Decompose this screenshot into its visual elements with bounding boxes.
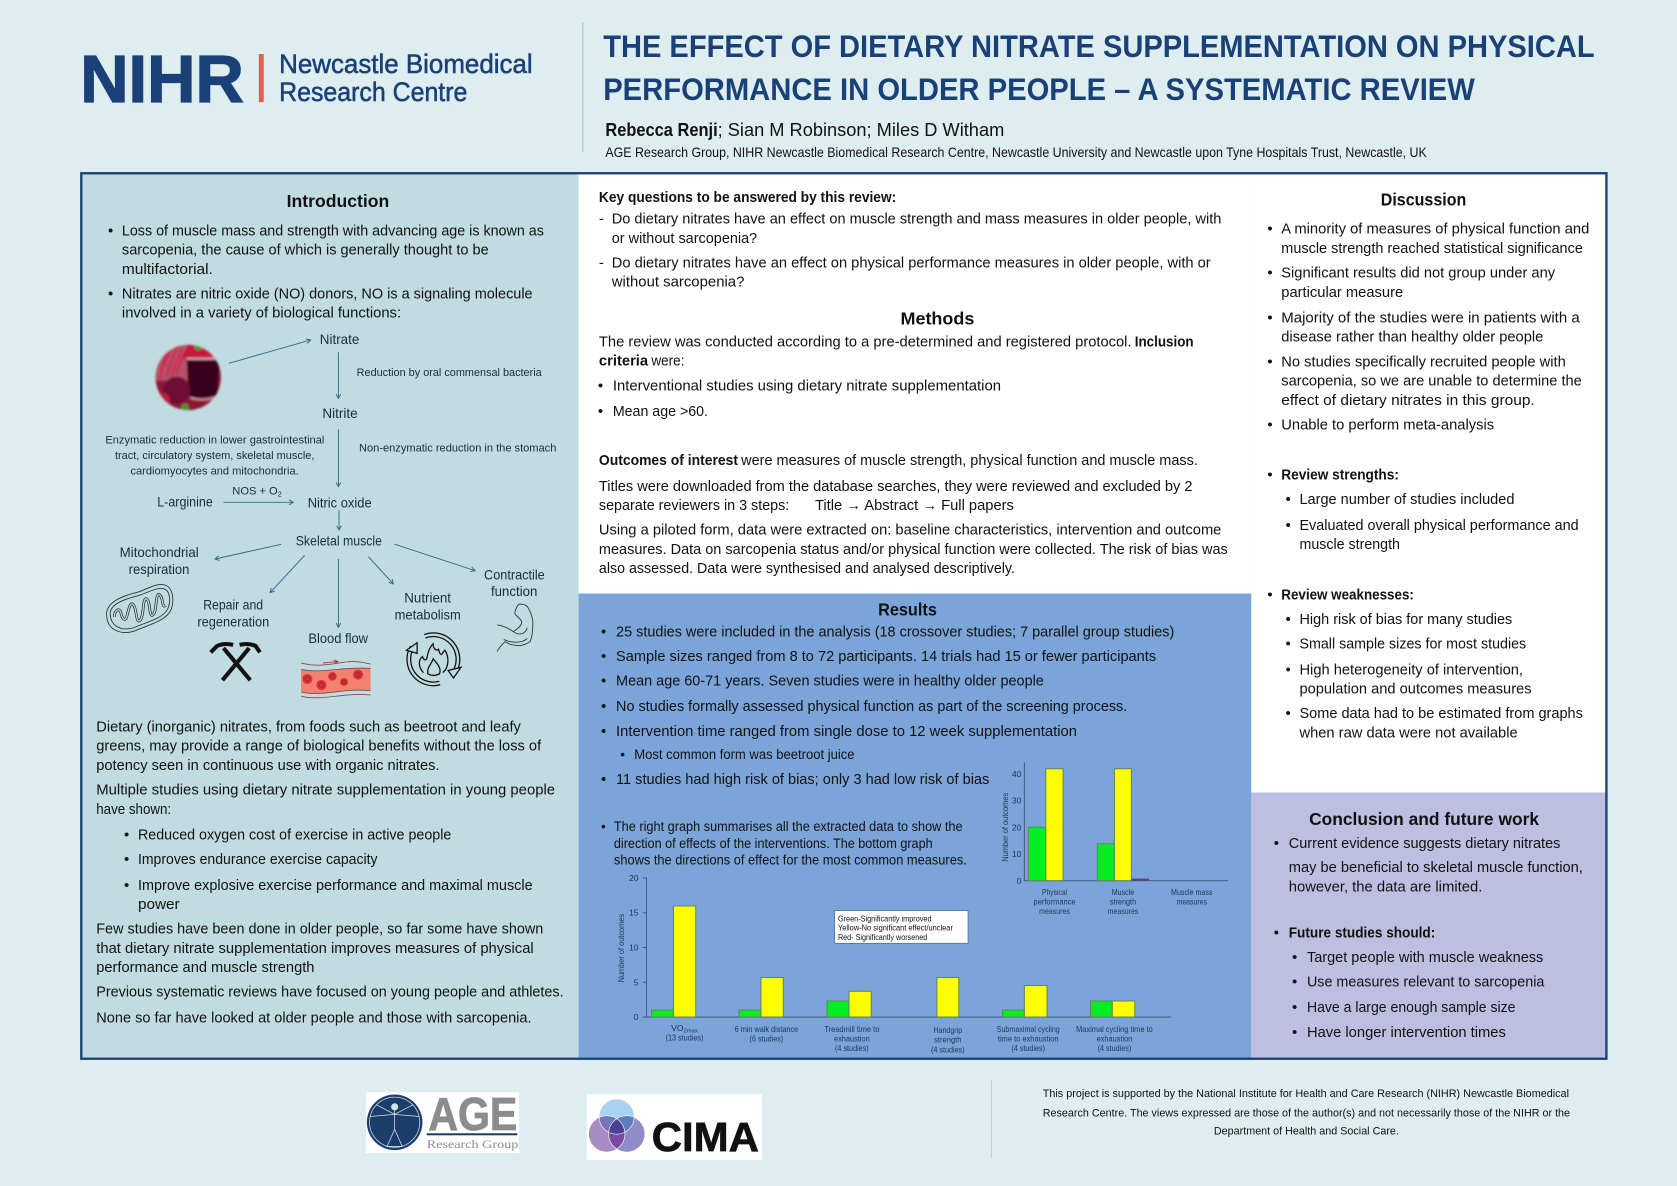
list: future studies: • (1292, 1024, 1297, 1041)
bars: muscle strength (1097, 769, 1149, 881)
panel: conclusion and future work (1251, 792, 1606, 1059)
arrow: to nutrient metabolism (368, 557, 393, 584)
text block: graph explanation (601, 819, 967, 868)
label: contractile function (484, 567, 545, 599)
category labels (1034, 887, 1212, 916)
list: discussion points: • (1267, 309, 1273, 326)
arrow: nitrite to nitric oxide (337, 429, 339, 487)
text block: sarcopenia bullet: sarcopenia, the cause of which is generally thought to be (122, 242, 489, 259)
logo: NIHR Newcastle Biomedical Research Centre (80, 42, 533, 117)
label: enzymatic reduction: Enzymatic reduction in lower gastrointestinal (105, 434, 324, 446)
list: review strengths: • (1267, 467, 1273, 484)
list: review strengths: Review strengths: (1281, 467, 1399, 484)
panel: key questions and methods (579, 173, 1251, 594)
list: inclusion criteria (598, 377, 1001, 420)
text block: screening: Title → Abstract → Full papers (815, 497, 1014, 514)
label: NOS + O2: 2 (278, 489, 282, 498)
axis labels: 5 (634, 977, 639, 987)
list: discussion points: • (1267, 265, 1273, 282)
list: discussion points: • (1267, 416, 1273, 433)
text block: graph explanation: • (601, 819, 606, 834)
bar chart: most common measures (616, 873, 1171, 1054)
axis labels (616, 873, 639, 1022)
text block: sarcopenia bullet: multifactorial. (122, 261, 213, 278)
category labels: strength (934, 1035, 962, 1045)
logo: CIMA (587, 1094, 762, 1160)
category labels: measures (1177, 897, 1207, 907)
label: enzymatic reduction: tract, circulatory system, skeletal muscle, (115, 450, 314, 462)
axis labels: 10 (629, 943, 639, 953)
panel: results (579, 594, 1251, 1059)
list: discussion points: A minority of measures of physical function and (1281, 221, 1589, 238)
label: contractile function: function (491, 584, 537, 599)
category labels: performance (1034, 896, 1076, 906)
category labels: exhaustion (834, 1034, 870, 1044)
text block: graph explanation: The right graph summarises all the extracted data to show the (614, 819, 963, 834)
arrow: to repair (270, 555, 305, 593)
category labels: Submaximal cycling (997, 1024, 1060, 1034)
icon: metabolism cycle with flame (406, 635, 461, 684)
category labels: Physical (1042, 887, 1067, 897)
arrow: to contractile function (394, 544, 475, 571)
text block: sarcopenia bullet: • (108, 222, 113, 239)
list: review weaknesses: • (1286, 636, 1291, 653)
label: enzymatic reduction (105, 434, 324, 477)
logo: CIMA: CIMA (652, 1114, 759, 1160)
text block: current evidence: • (1274, 835, 1279, 852)
text block: older people studies (96, 921, 543, 976)
axis labels: 30 (1012, 796, 1022, 806)
text block: older people studies: that dietary nitrate supplementation improves measures of physical (96, 940, 534, 957)
label: repair and regeneration: regeneration (197, 614, 269, 629)
category labels: Handgrip (933, 1025, 962, 1035)
list: results bullets: 11 studies had high risk of bias; only 3 had low risk of bias (616, 771, 989, 788)
category labels: (4 studies) (835, 1043, 869, 1053)
arrow: nitric oxide to skeletal muscle (338, 510, 340, 530)
list: discussion points: • (1267, 221, 1273, 238)
list: inclusion criteria: • (598, 403, 603, 420)
list: inclusion criteria: • (598, 377, 603, 394)
list: review weaknesses: Some data had to be estimated from graphs (1299, 705, 1583, 722)
text block: young people studies (96, 782, 555, 818)
label: nutrient metabolism: metabolism (395, 607, 461, 622)
title: PERFORMANCE IN OLDER PEOPLE – A SYSTEMATIC REVIEW (603, 72, 1476, 107)
category labels: 2max (683, 1029, 698, 1035)
logo: AGE Research Group: AGE (428, 1088, 517, 1140)
list: discussion points: No studies specifically recruited people with (1281, 353, 1566, 370)
legend: Yellow-No significant effect/unclear (838, 923, 953, 933)
text block: data extraction: Using a piloted form, data were extracted on: baseline characteristics, intervention and outcome (599, 522, 1221, 539)
axis labels (1000, 769, 1022, 886)
text block: outcomes: Outcomes of interest (599, 452, 738, 469)
text block: dietary nitrates: potency seen in continuous use with organic nitrates. (96, 757, 440, 774)
list: discussion points: disease rather than healthy older people (1281, 329, 1543, 346)
axis labels: 10 (1012, 849, 1022, 859)
list: review weaknesses: • (1286, 705, 1291, 722)
title (603, 29, 1595, 107)
text block: nitrates bullet: • (108, 285, 113, 302)
category labels: exhaustion (1097, 1034, 1133, 1044)
category labels: measures (1039, 906, 1070, 916)
arrow: nitrate to nitrite (337, 352, 339, 398)
list: effects in young people: • (124, 877, 129, 894)
list: future studies: Have longer intervention times (1307, 1024, 1506, 1041)
list: review weaknesses (1267, 586, 1583, 741)
list: review strengths: muscle strength (1299, 536, 1400, 553)
arrow: beetroot to nitrate (229, 340, 311, 363)
axis labels: 0 (634, 1012, 639, 1022)
label: non-enzymatic reduction: Non-enzymatic reduction in the stomach (359, 442, 556, 454)
authors: ; Sian M Robinson; Miles D Witham (718, 120, 1004, 140)
text block: research gap: None so far have looked at older people and those with sarcopenia. (96, 1009, 532, 1026)
label: nitric oxide: Nitric oxide (308, 496, 372, 511)
label: mitochondrial respiration: respiration (129, 562, 189, 577)
text block: screening: separate reviewers in 3 steps: (599, 497, 789, 514)
list: review strengths: Evaluated overall physical performance and (1299, 517, 1579, 534)
list: review weaknesses: • (1286, 661, 1291, 678)
list: review strengths (1267, 467, 1579, 553)
category labels: (4 studies) (1011, 1043, 1045, 1053)
list: discussion points: Unable to perform meta-analysis (1281, 416, 1494, 433)
bars: physical performance (1028, 769, 1063, 881)
list: review strengths: • (1286, 517, 1291, 534)
text block: previous reviews: Previous systematic reviews have focused on young people and athletes. (96, 984, 564, 1001)
label: contractile function: Contractile (484, 567, 545, 582)
text block: current evidence: may be beneficial to skeletal muscle function, (1289, 859, 1583, 876)
icon: beetroot juice (155, 342, 221, 411)
axis labels: 20 (1012, 822, 1022, 832)
text block: current evidence: Current evidence suggests dietary nitrates (1289, 835, 1560, 852)
list: effects in young people: • (124, 827, 129, 844)
authors: Rebecca Renji (605, 120, 718, 140)
text block: current evidence: however, the data are limited. (1289, 878, 1482, 895)
bars: VO2max (652, 906, 696, 1017)
label: mitochondrial respiration: Mitochondrial (120, 545, 199, 560)
list: effects in young people: Improve explosive exercise performance and maximal muscle (138, 877, 533, 894)
arrow: l-arginine to nitric oxide (223, 501, 293, 503)
axis labels: 20 (629, 873, 639, 883)
heading: conclusion: Conclusion and future work (1309, 809, 1539, 829)
list: results bullets: Most common form was beetroot juice (634, 747, 855, 762)
list: review weaknesses: High heterogeneity of intervention, (1299, 661, 1523, 678)
category labels: (4 studies) (931, 1044, 965, 1054)
logo: AGE Research Group (366, 1088, 519, 1153)
category labels: measures (1108, 906, 1138, 916)
panel: discussion (1251, 173, 1606, 792)
arrow: to mitochondrial respiration (215, 544, 281, 559)
list: results bullets: • (620, 747, 625, 762)
label: nitrite: Nitrite (322, 406, 358, 421)
panel: introduction (81, 173, 579, 1059)
list: effects in young people: Improves endurance exercise capacity (138, 851, 378, 868)
list: future studies (1274, 924, 1545, 1041)
list: results bullets: • (601, 723, 606, 740)
list: effects in young people: • (124, 851, 129, 868)
list: effects in young people: power (138, 896, 180, 913)
text block: dietary nitrates: greens, may provide a range of biological benefits without the loss of (96, 738, 542, 755)
text block: sarcopenia bullet (108, 222, 544, 278)
logo: AGE Research Group: Research Group (427, 1138, 519, 1151)
text block: protocol: The review was conducted according to a pre-determined and registered protocol. (599, 333, 1132, 350)
category labels: strength (1110, 896, 1136, 906)
list: review weaknesses: when raw data were not available (1298, 724, 1518, 741)
label: repair and regeneration: Repair and (203, 597, 263, 612)
text block: data extraction: measures. Data on sarcopenia status and/or physical function were collected. The risk of bias was (599, 541, 1228, 558)
list: discussion points: muscle strength reached statistical significance (1281, 240, 1583, 257)
text block: current evidence (1274, 835, 1583, 895)
list: future studies: • (1292, 999, 1297, 1016)
category labels: (13 studies) (666, 1033, 704, 1043)
text block: dietary nitrates (96, 718, 542, 774)
heading: key questions: Key questions to be answered by this review: (599, 189, 896, 206)
text block: older people studies: performance and muscle strength (96, 959, 314, 976)
text block: data extraction (599, 522, 1228, 577)
title: THE EFFECT OF DIETARY NITRATE SUPPLEMENTATION ON PHYSICAL (603, 29, 1595, 64)
text block: protocol: criteria (599, 353, 649, 370)
bars: maximal cycling (1090, 1001, 1135, 1017)
text block: screening: Titles were downloaded from the database searches, they were reviewed and excluded by 2 (599, 478, 1193, 495)
text block: outcomes: were measures of muscle strength, physical function and muscle mass. (740, 452, 1198, 469)
list: review strengths: Large number of studies included (1299, 491, 1514, 508)
label: skeletal muscle: Skeletal muscle (296, 533, 382, 548)
list: inclusion criteria: Mean age >60. (613, 403, 708, 420)
list: results bullets: 25 studies were included in the analysis (18 crossover studies; 7 parallel group studies) (616, 623, 1174, 640)
icon: blood vessel (301, 660, 371, 698)
list: future studies: Future studies should: (1289, 924, 1435, 941)
logo: NIHR Newcastle Biomedical Research Centre: NIHR (80, 42, 244, 117)
list: discussion points (1267, 221, 1589, 433)
list: review weaknesses: High risk of bias for many studies (1299, 611, 1512, 628)
icon: crossed hammers (211, 644, 260, 680)
text block: nitrates bullet: Nitrates are nitric oxide (NO) donors, NO is a signaling molecule (122, 285, 533, 302)
text block: graph explanation: shows the directions of effect for the most common measures. (614, 853, 967, 868)
list: results bullets: • (601, 771, 606, 788)
heading: results: Results (878, 599, 937, 619)
list: review strengths: • (1286, 491, 1291, 508)
category labels: (6 studies) (750, 1034, 783, 1044)
list: future studies: • (1274, 924, 1279, 941)
list: review weaknesses: Review weaknesses: (1281, 586, 1414, 603)
list: discussion points: Significant results did not group under any (1281, 265, 1556, 282)
text block: young people studies: have shown: (96, 801, 171, 818)
icon: flexed arm muscle (497, 604, 533, 652)
text block: sarcopenia bullet: Loss of muscle mass and strength with advancing age is known as (122, 222, 544, 239)
axis labels: Number of outcomes (616, 914, 626, 982)
label: mitochondrial respiration (120, 545, 199, 577)
affiliation: AGE Research Group, NIHR Newcastle Biomedical Research Centre, Newcastle University and Newcastle upon Tyne Hospitals Trust, Newcastle, UK (605, 145, 1427, 160)
list: effects in young people (124, 827, 533, 913)
category labels: VO (671, 1023, 683, 1033)
text block: protocol: were: (650, 353, 684, 370)
list: key questions: Do dietary nitrates have an effect on muscle strength and mass measures in older people, with (612, 211, 1221, 228)
label: l-arginine: L-arginine (157, 495, 213, 510)
text block: protocol: Inclusion (1135, 333, 1194, 350)
category labels: Muscle (1112, 887, 1134, 897)
list: review weaknesses: Small sample sizes for most studies (1299, 636, 1526, 653)
bars: 6 min walk distance (739, 978, 783, 1017)
legend (835, 911, 968, 943)
text block: screening (599, 478, 1193, 514)
legend: Green-Significantly improved (838, 913, 932, 923)
category labels: time to exhaustion (998, 1034, 1059, 1044)
list: discussion points: sarcopenia, so we are unable to determine the (1281, 373, 1582, 390)
list: results bullets: • (601, 698, 606, 715)
label: blood flow: Blood flow (308, 631, 368, 646)
list: key questions (599, 211, 1221, 291)
list: key questions: without sarcopenia? (611, 274, 744, 291)
text block: nitrates bullet (108, 285, 533, 322)
list: effects in young people: Reduced oxygen cost of exercise in active people (138, 827, 451, 844)
list: key questions: - (599, 254, 604, 271)
diagram: nitrate pathway (105, 332, 556, 698)
text block: funding acknowledgement: Research Centre. The views expressed are those of the author(s) and not necessarily those of the NIHR or the (1043, 1107, 1570, 1119)
list: future studies: Target people with muscle weakness (1307, 949, 1543, 966)
list: review weaknesses: population and outcomes measures (1299, 681, 1532, 698)
label: nutrient metabolism (395, 590, 461, 622)
axis labels: 15 (629, 908, 639, 918)
text block: protocol (599, 333, 1194, 370)
text block: data extraction: also assessed. Data were synthesised and analysed descriptively. (599, 560, 1015, 577)
text block: older people studies: Few studies have been done in older people, so far some have shown (96, 921, 543, 938)
axis labels: 40 (1012, 769, 1022, 779)
list: inclusion criteria: Interventional studies using dietary nitrate supplementation (613, 377, 1001, 394)
list: future studies: Use measures relevant to sarcopenia (1307, 974, 1545, 991)
list: results bullets: Mean age 60-71 years. Seven studies were in healthy older people (616, 673, 1044, 690)
list: discussion points: particular measure (1281, 284, 1403, 301)
list: key questions: - (599, 211, 604, 228)
category labels: 6 min walk distance (735, 1024, 798, 1034)
legend: Red- Significantly worsened (838, 932, 927, 942)
list: key questions: or without sarcopenia? (612, 230, 757, 247)
heading: discussion: Discussion (1381, 189, 1466, 209)
axis labels: 0 (1017, 876, 1022, 886)
list: review weaknesses: • (1267, 586, 1273, 603)
list: discussion points: • (1267, 353, 1273, 370)
text block: funding acknowledgement: Department of Health and Social Care. (1214, 1126, 1399, 1138)
bar chart: all outcomes by measure category (1000, 763, 1228, 916)
logo: NIHR Newcastle Biomedical Research Centre: Newcastle Biomedical (279, 49, 533, 79)
list: results bullets: No studies formally assessed physical function as part of the screening process. (616, 698, 1127, 715)
heading: methods: Methods (901, 309, 974, 329)
list: results bullets: • (601, 623, 606, 640)
text block: young people studies: Multiple studies using dietary nitrate supplementation in young people (96, 782, 555, 799)
category labels: Muscle mass (1171, 887, 1212, 897)
label: oral reduction: Reduction by oral commensal bacteria (357, 367, 543, 379)
text block: funding acknowledgement: This project is supported by the National Institute for Health and Care Research (NIHR) Newcastle Biomedical (1043, 1088, 1569, 1100)
label: nitrate: Nitrate (320, 332, 359, 347)
text block: dietary nitrates: Dietary (inorganic) nitrates, from foods such as beetroot and leafy (96, 718, 521, 735)
text block: funding acknowledgement (1043, 1088, 1570, 1138)
list: future studies: • (1292, 974, 1297, 991)
list: results bullets: Intervention time ranged from single dose to 12 week supplementation (616, 723, 1077, 740)
bars: treadmill time (827, 991, 871, 1017)
category labels: Treadmill time to (824, 1024, 880, 1034)
heading: introduction: Introduction (287, 191, 389, 211)
arrow: to blood flow (337, 559, 339, 627)
label: NOS + O2: NOS + O (232, 485, 278, 497)
list: results bullets (601, 623, 1174, 788)
logo: NIHR Newcastle Biomedical Research Centre: Research Centre (279, 77, 467, 107)
bars: handgrip strength (937, 978, 959, 1017)
list: results bullets: Sample sizes ranged from 8 to 72 participants. 14 trials had 15 or fewer participants (616, 648, 1156, 665)
category labels: (4 studies) (1098, 1043, 1131, 1053)
list: review weaknesses: • (1286, 611, 1291, 628)
category labels: Maximal cycling time to (1076, 1024, 1153, 1034)
list: results bullets: • (601, 648, 606, 665)
text block: nitrates bullet: involved in a variety of biological functions: (122, 305, 401, 322)
label: repair and regeneration (197, 597, 269, 629)
list: discussion points: effect of dietary nitrates in this group. (1281, 392, 1535, 409)
label: enzymatic reduction: cardiomyocytes and mitochondria. (130, 465, 299, 477)
list: future studies: Have a large enough sample size (1307, 999, 1516, 1016)
list: future studies: • (1292, 949, 1297, 966)
list: results bullets: • (601, 673, 606, 690)
bars: submaximal cycling (1003, 986, 1047, 1017)
icon: mitochondrion (107, 585, 173, 632)
label: nutrient metabolism: Nutrient (404, 590, 451, 605)
text block: graph explanation: direction of effects of the interventions. The bottom graph (614, 836, 933, 851)
list: key questions: Do dietary nitrates have an effect on physical performance measures in older people, with or (612, 254, 1211, 271)
list: discussion points: Majority of the studies were in patients with a (1281, 309, 1580, 326)
axis labels: Number of outcomes (1000, 793, 1010, 862)
category labels (666, 1023, 1153, 1054)
